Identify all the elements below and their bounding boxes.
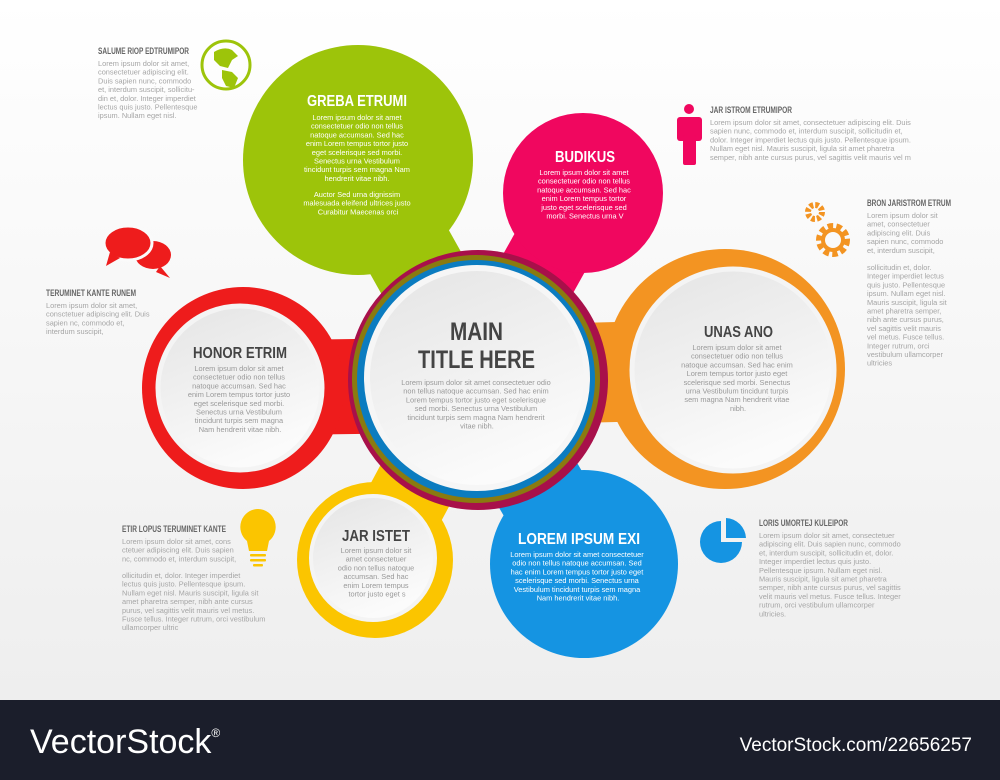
panel: yellow JAR ISTET: amet consectetuer: [346, 555, 407, 564]
panel: pink BUDIKUS: enim Lorem tempus tortor: [542, 194, 627, 203]
text: TERUMINET KANTE RUNEM: consctetuer adipiscing elit. Duis: [46, 310, 150, 319]
text: LORIS UMORTEJ KULEIPOR: Lorem ipsum dolor sit amet, consectetuer: [759, 531, 895, 540]
panel: yellow JAR ISTET: Lorem ipsum dolor sit: [341, 546, 411, 555]
text: JAR ISTROM ETRUMIPOR: Lorem ipsum dolor sit amet, consectetuer adipiscing elit. Duis: [710, 118, 911, 127]
text: TERUMINET KANTE RUNEM: Lorem ipsum dolor sit amet,: [46, 301, 137, 310]
panel: green GREBA ETRUMI: Curabitur Maecenas orci: [318, 207, 399, 216]
panel: orange UNAS ANO: urna Vestibulum tincidunt turpis: [686, 386, 789, 396]
icon: person: [677, 104, 702, 165]
panel: pink BUDIKUS: [503, 113, 663, 273]
text: SALUME RIOP EDTRUMIPOR: Lorem ipsum dolor sit amet,: [98, 59, 189, 68]
text: ETIR LOPUS TERUMINET KANTE: nc, commodo et, interdum suscipit,: [122, 554, 236, 563]
text: LORIS UMORTEJ KULEIPOR: LORIS UMORTEJ KULEIPOR: [759, 518, 848, 528]
text: BRON JARISTROM ETRUM: sollicitudin et, dolor.: [867, 263, 932, 272]
panel: blue LOREM IPSUM EXI: odio non tellus natoque accumsan. Sed: [512, 559, 642, 568]
panel: red HONOR ETRIM: consectetuer odio non tellus: [193, 373, 285, 382]
text: ETIR LOPUS TERUMINET KANTE: ETIR LOPUS TERUMINET KANTE: [122, 524, 226, 534]
text: BRON JARISTROM ETRUM: vestibulum ullamcorper: [867, 350, 944, 359]
panel: blue LOREM IPSUM EXI: scelerisque sed morbi. Senectus urna: [515, 576, 640, 585]
panel: green GREBA ETRUMI: malesuada eleifend ultrices justo: [303, 199, 411, 208]
text: SALUME RIOP EDTRUMIPOR: et, interdum suscipit, sollicitu-: [98, 85, 195, 94]
panel: green GREBA ETRUMI: eget scelerisque sed morbi.: [312, 148, 402, 157]
text: BRON JARISTROM ETRUM: amet pharetra semper,: [867, 306, 941, 316]
text: SALUME RIOP EDTRUMIPOR: lectus quis justo. Pellentesque: [98, 102, 197, 112]
panel: pink BUDIKUS: morbi. Senectus urna V: [546, 212, 624, 220]
text: LORIS UMORTEJ KULEIPOR: et, interdum suscipit, sollicitudin et, dolor.: [759, 548, 893, 557]
panel: main title center: vitae nibh.: [460, 422, 494, 430]
panel: blue LOREM IPSUM EXI: [490, 470, 678, 658]
icon: pie chart: [700, 518, 746, 563]
text: ETIR LOPUS TERUMINET KANTE: amet pharetra semper, nibh ante cursus: [122, 597, 253, 606]
footer bar: ®: [211, 726, 220, 740]
panel: pink BUDIKUS: natoque accumsan. Sed hac: [537, 185, 631, 194]
panel: blue LOREM IPSUM EXI: hac enim Lorem tempus tortor justo eget: [511, 567, 643, 576]
panel: pink BUDIKUS: BUDIKUS: [555, 149, 615, 166]
panel: red HONOR ETRIM: [142, 287, 344, 489]
text: TERUMINET KANTE RUNEM: TERUMINET KANTE RUNEM: [46, 288, 136, 298]
text: LORIS UMORTEJ KULEIPOR: rutrum, orci vestibulum ullamcorper: [759, 601, 875, 610]
text: LORIS UMORTEJ KULEIPOR: Integer imperdiet lectus quis justo.: [759, 557, 871, 566]
panel: yellow JAR ISTET: tortor justo eget s: [348, 590, 406, 598]
text: BRON JARISTROM ETRUM: nibh ante cursus purus,: [867, 315, 944, 324]
text: TERUMINET KANTE RUNEM: sapien nc, commodo et,: [46, 318, 124, 327]
panel: blue LOREM IPSUM EXI: LOREM IPSUM EXI: [518, 531, 640, 548]
panel: yellow JAR ISTET: odio non tellus natoque: [338, 563, 414, 572]
text: BRON JARISTROM ETRUM: amet, consectetuer: [867, 220, 930, 229]
panel: main title center: Lorem ipsum dolor sit amet consectetuer odio: [401, 378, 551, 387]
text: BRON JARISTROM ETRUM: BRON JARISTROM ETRUM: [867, 198, 951, 208]
text: BRON JARISTROM ETRUM: Integer imperdiet lectus: [867, 272, 944, 281]
panel: green GREBA ETRUMI: Lorem ipsum dolor sit amet: [312, 113, 402, 122]
text: BRON JARISTROM ETRUM: et, interdum suscipit,: [867, 246, 935, 255]
panel: green GREBA ETRUMI: Senectus urna Vestibulum: [314, 156, 400, 166]
icon: speech bubbles: [104, 226, 171, 278]
panel: green GREBA ETRUMI: enim Lorem tempus tortor justo: [306, 139, 408, 148]
text: JAR ISTROM ETRUMIPOR: dolor. Integer imperdiet lectus quis justo. Pellentesque ipsum.: [710, 135, 911, 144]
text: ETIR LOPUS TERUMINET KANTE: lectus quis justo. Pellentesque ipsum.: [122, 580, 245, 589]
text: BRON JARISTROM ETRUM: Integer rutrum, orci: [867, 341, 930, 350]
panel: orange UNAS ANO: consectetuer odio non tellus: [691, 352, 783, 361]
text: BRON JARISTROM ETRUM: Lorem ipsum dolor sit: [867, 211, 938, 220]
icon: globe: [202, 41, 250, 89]
text: SALUME RIOP EDTRUMIPOR: ipsum. Nullam eget nisl.: [98, 111, 176, 120]
panel: orange UNAS ANO: scelerisque sed morbi. Senectus: [684, 378, 791, 387]
panel: pink BUDIKUS: consectetuer odio non tellus: [538, 177, 630, 186]
panel: orange UNAS ANO: UNAS ANO: [704, 324, 773, 341]
icon: light bulb: [240, 509, 276, 566]
text: ETIR LOPUS TERUMINET KANTE: Lorem ipsum dolor sit amet, cons: [122, 537, 231, 546]
text: TERUMINET KANTE RUNEM: [46, 288, 150, 336]
panel: main title center: TITLE HERE: [418, 346, 535, 374]
panel: yellow JAR ISTET: enim Lorem tempus: [343, 581, 409, 590]
text: LORIS UMORTEJ KULEIPOR: semper, nibh ante cursus purus, vel sagittis: [759, 583, 901, 592]
text: ETIR LOPUS TERUMINET KANTE: Nullam eget nisl. Mauris suscipit, ligula sit: [122, 588, 258, 597]
panel: blue LOREM IPSUM EXI: Lorem ipsum dolor sit amet consectetuer: [510, 550, 644, 559]
text: SALUME RIOP EDTRUMIPOR: [98, 46, 197, 120]
panel: green GREBA ETRUMI: natoque accumsan. Sed hac: [310, 130, 404, 139]
text: SALUME RIOP EDTRUMIPOR: consectetuer adipiscing elit.: [98, 68, 189, 77]
panel: orange UNAS ANO: nibh.: [730, 404, 746, 413]
text: JAR ISTROM ETRUMIPOR: [710, 105, 911, 162]
panel: red HONOR ETRIM: Senectus urna Vestibulum: [196, 408, 282, 416]
panel: red HONOR ETRIM: tincidunt turpis sem magna: [195, 416, 284, 425]
panel: orange UNAS ANO: Lorem tempus tortor justo eget: [687, 369, 787, 378]
text: SALUME RIOP EDTRUMIPOR: SALUME RIOP EDTRUMIPOR: [98, 46, 189, 56]
panel: main title center: non tellus natoque accumsan. Sed hac enim: [403, 387, 549, 396]
panel: green GREBA ETRUMI: [243, 45, 473, 275]
panel: orange UNAS ANO: [605, 249, 845, 489]
panel: red HONOR ETRIM: eget scelerisque sed morbi.: [194, 399, 284, 408]
panel: green GREBA ETRUMI: Auctor Sed urna dignissim: [314, 190, 400, 199]
text: JAR ISTROM ETRUMIPOR: semper, nibh ante cursus purus, vel sagittis velit mauris vel m: [710, 153, 911, 162]
text: ETIR LOPUS TERUMINET KANTE: ctetuer adipiscing elit. Duis sapien: [122, 546, 234, 555]
panel: green GREBA ETRUMI: GREBA ETRUMI: [307, 93, 407, 110]
panel: red HONOR ETRIM: enim Lorem tempus tortor justo: [188, 390, 290, 399]
text: BRON JARISTROM ETRUM: ultricies: [867, 359, 892, 368]
panel: red HONOR ETRIM: Lorem ipsum dolor sit amet: [194, 364, 284, 373]
text: ETIR LOPUS TERUMINET KANTE: ullamcorper ultric: [122, 623, 179, 632]
panel: yellow JAR ISTET: [297, 482, 453, 638]
text: JAR ISTROM ETRUMIPOR: Nullam eget nisl. Mauris suscipit, ligula sit amet pharetra: [710, 144, 895, 153]
text: SALUME RIOP EDTRUMIPOR: Duis sapien nunc, commodo: [98, 76, 191, 85]
text: ETIR LOPUS TERUMINET KANTE: ollicitudin et, dolor. Integer imperdiet: [122, 571, 240, 580]
panel: green GREBA ETRUMI: tincidunt turpis sem magna Nam: [304, 165, 410, 174]
panel: main title center: sed morbi. Senectus urna Vestibulum: [415, 404, 537, 413]
panel: main title center: [348, 250, 608, 510]
text: SALUME RIOP EDTRUMIPOR: din et, dolor. Integer imperdiet: [98, 94, 196, 103]
text: LORIS UMORTEJ KULEIPOR: Mauris suscipit, ligula sit amet pharetra: [759, 574, 888, 584]
text: JAR ISTROM ETRUMIPOR: JAR ISTROM ETRUMIPOR: [710, 105, 792, 115]
panel: orange UNAS ANO: sem magna Nam hendrerit vitae: [684, 395, 790, 404]
text: BRON JARISTROM ETRUM: sapien nunc, commodo: [867, 237, 943, 246]
text: LORIS UMORTEJ KULEIPOR: adipiscing elit. Duis sapien nunc, commodo: [759, 540, 901, 549]
icon: gears: [808, 205, 846, 253]
footer bar: [0, 700, 1000, 780]
text: BRON JARISTROM ETRUM: adipiscing elit. Duis: [867, 228, 931, 237]
text: LORIS UMORTEJ KULEIPOR: Pellentesque ipsum. Nullam eget nisl.: [759, 566, 882, 575]
panel: green GREBA ETRUMI: consectetuer odio non tellus: [311, 122, 403, 131]
panel: pink BUDIKUS: justo eget scelerisque sed: [540, 203, 627, 212]
text: TERUMINET KANTE RUNEM: interdum suscipit,: [46, 327, 104, 336]
panel: orange UNAS ANO: natoque accumsan. Sed hac enim: [681, 360, 793, 369]
panel: red HONOR ETRIM: HONOR ETRIM: [193, 345, 287, 362]
text: BRON JARISTROM ETRUM: Mauris suscipit, ligula sit: [867, 298, 947, 307]
text: JAR ISTROM ETRUMIPOR: sapien nunc, commodo et, interdum suscipit, sollicitudin et,: [710, 127, 903, 136]
panel: yellow JAR ISTET: accumsan. Sed hac: [344, 572, 409, 581]
panel: yellow JAR ISTET: JAR ISTET: [342, 528, 410, 545]
text: ETIR LOPUS TERUMINET KANTE: [122, 524, 265, 632]
text: BRON JARISTROM ETRUM: [867, 198, 951, 368]
panel: red HONOR ETRIM: Nam hendrerit vitae nibh.: [199, 425, 281, 434]
text: BRON JARISTROM ETRUM: quis justo. Pellentesque: [867, 280, 945, 289]
text: ETIR LOPUS TERUMINET KANTE: Fusce tellus. Integer rutrum, orci vestibulum: [122, 614, 265, 624]
panel: main title center: MAIN: [450, 318, 503, 346]
panel: orange UNAS ANO: Lorem ipsum dolor sit amet: [692, 343, 782, 352]
panel: pink BUDIKUS: Lorem ipsum dolor sit amet: [539, 168, 629, 177]
panel: green GREBA ETRUMI: hendrerit vitae nibh.: [325, 174, 389, 183]
panel: main title center: tincidunt turpis sem magna Nam hendrerit: [407, 413, 545, 422]
text: BRON JARISTROM ETRUM: vel sagittis velit mauris: [867, 324, 941, 333]
text: BRON JARISTROM ETRUM: ipsum. Nullam eget nisl.: [867, 289, 945, 298]
text: ETIR LOPUS TERUMINET KANTE: purus, vel sagittis velit mauris vel metus.: [122, 606, 254, 615]
text: BRON JARISTROM ETRUM: vel metus. Fusce tellus.: [867, 333, 944, 342]
text: LORIS UMORTEJ KULEIPOR: velit mauris vel metus. Fusce tellus. Integer: [759, 592, 901, 601]
text: LORIS UMORTEJ KULEIPOR: ultricies.: [759, 609, 786, 618]
text: LORIS UMORTEJ KULEIPOR: [759, 518, 901, 618]
panel: blue LOREM IPSUM EXI: Vestibulum tincidunt turpis sem magna: [514, 585, 641, 594]
footer bar: VectorStock.com/22656257: [740, 735, 972, 756]
panel: blue LOREM IPSUM EXI: Nam hendrerit vitae nibh.: [537, 594, 619, 602]
panel: main title center: Lorem tempus tortor justo eget scelerisque: [406, 395, 546, 404]
connectors: [243, 160, 733, 564]
panel: red HONOR ETRIM: natoque accumsan. Sed hac: [192, 381, 286, 390]
footer bar: VectorStock: [30, 723, 211, 761]
